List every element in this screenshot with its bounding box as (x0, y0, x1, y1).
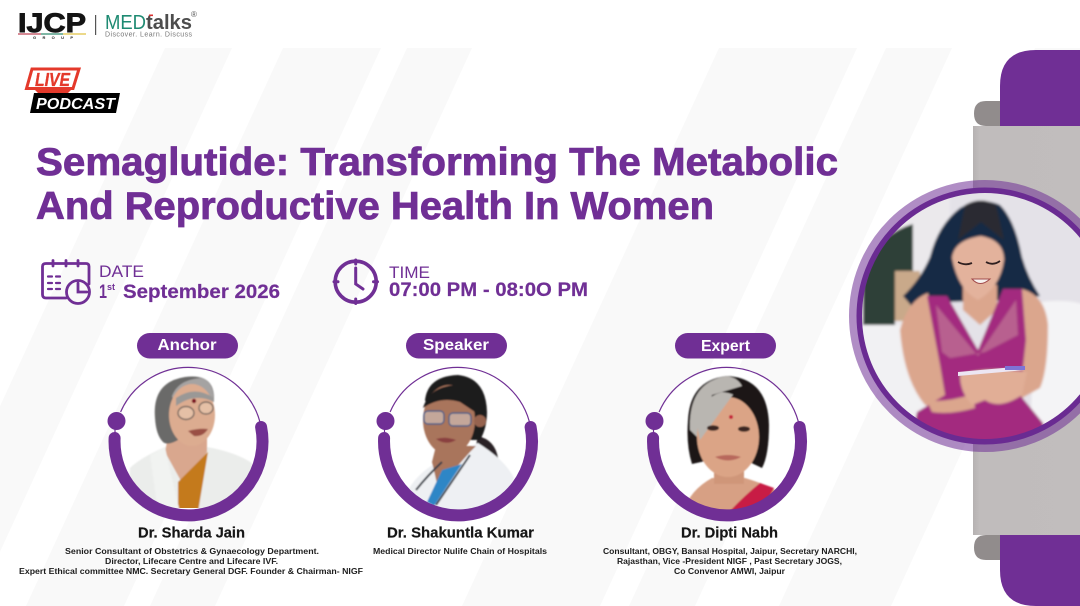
date text: DATE (99, 262, 144, 281)
panel: speaker (373, 333, 547, 556)
panel: expert (603, 333, 857, 576)
logo: IJCP MEDtalks: GROUP (33, 35, 73, 40)
name: Dr. Shakuntla Kumar: Dr. Shakuntla Kumar (387, 526, 534, 542)
ring: anchor (108, 367, 263, 515)
live podcast badge (26, 69, 120, 113)
bio: Dr. Dipti Nabh (603, 546, 857, 576)
live podcast badge: PODCAST (36, 96, 116, 113)
logo: IJCP MEDtalks: MED (105, 12, 146, 34)
portrait: Dr. Dipti Nabh (683, 376, 775, 512)
bio: Dr. Sharda Jain: Director, Lifecare Centre and Lifecare IVF. (105, 556, 278, 566)
name: Dr. Sharda Jain: Dr. Sharda Jain (138, 526, 245, 542)
title: And Reproductive Health In Women (36, 185, 714, 228)
portrait: Dr. Sharda Jain (128, 376, 256, 512)
ring: expert (646, 367, 801, 515)
bio: Dr. Sharda Jain: Expert Ethical committee NMC. Secretary General DGF. Founder & Chairman- NIGF (19, 566, 363, 576)
time text: 07:00 PM - 08:0O PM (389, 280, 588, 301)
icon: calendar (42, 260, 90, 304)
bio: Dr. Dipti Nabh: Consultant, OBGY, Bansal Hospital, Jaipur, Secretary NARCHI, (603, 546, 857, 556)
title: Semaglutide: Transforming The Metabolic (36, 141, 838, 184)
live podcast badge: LIVE (35, 70, 71, 90)
portrait background: speaker (385, 368, 531, 514)
logo: IJCP MEDtalks (18, 8, 197, 40)
photo: woman holding a test (853, 184, 1080, 448)
time text (389, 263, 588, 301)
icon: clock (334, 260, 378, 304)
date text: 1 (99, 282, 107, 303)
time text: TIME (389, 263, 430, 282)
title (36, 141, 838, 228)
logo: IJCP MEDtalks: IJCP (18, 8, 86, 38)
pill: expert (675, 333, 776, 358)
portrait: Dr. Shakuntla Kumar (408, 375, 514, 512)
pill: anchor (137, 333, 238, 358)
bio: Dr. Sharda Jain: Senior Consultant of Obstetrics & Gynaecology Department. (65, 546, 319, 556)
ring: speaker (376, 367, 532, 515)
date text (99, 262, 280, 303)
pill: anchor: Anchor (158, 337, 216, 354)
pill: speaker: Speaker (423, 337, 489, 354)
portrait background: expert (654, 368, 800, 514)
name: Dr. Dipti Nabh: Dr. Dipti Nabh (681, 526, 778, 542)
pill: speaker (406, 333, 507, 358)
pill: expert: Expert (701, 338, 751, 355)
logo: IJCP MEDtalks: Discover. Learn. Discuss (105, 32, 192, 38)
portrait background: anchor (116, 368, 262, 514)
panel: right side band (973, 50, 1080, 606)
bio: Dr. Dipti Nabh: Rajasthan, Vice -President NIGF , Past Secretary JOGS, (617, 556, 842, 566)
bio: Dr. Dipti Nabh: Co Convenor AMWI, Jaipur (674, 566, 786, 576)
date text: September 2026 (123, 282, 280, 303)
date text: st (107, 282, 115, 292)
logo: IJCP MEDtalks: talks (146, 12, 192, 34)
logo: IJCP MEDtalks: ® (191, 10, 197, 19)
bio: Dr. Sharda Jain (19, 546, 363, 576)
panel: anchor (19, 333, 363, 576)
bio: Dr. Shakuntla Kumar: Medical Director Nulife Chain of Hospitals (373, 546, 547, 556)
